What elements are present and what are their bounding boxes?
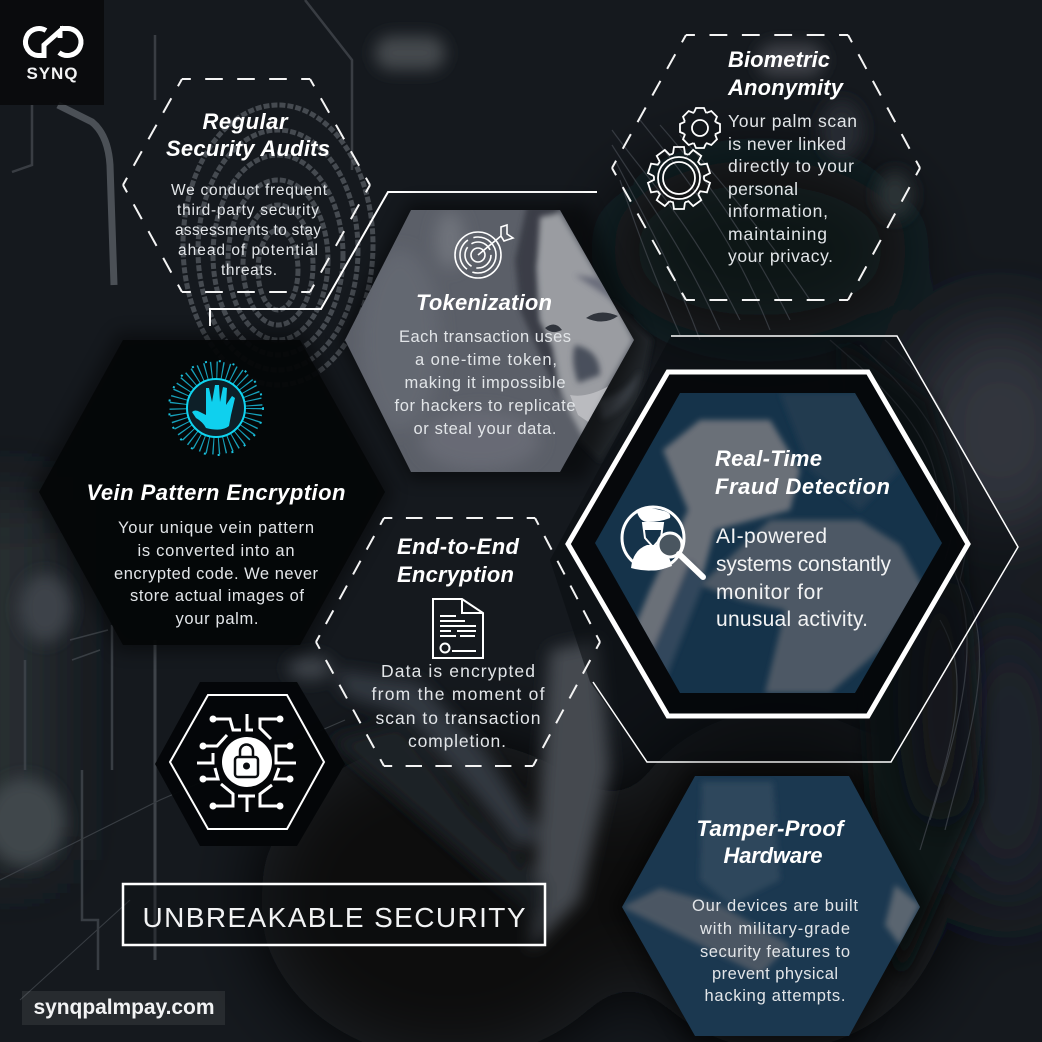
Tamper-Proof text (692, 897, 858, 1005)
panel: Tamper-Proof Hardware (612, 768, 930, 1042)
Real-Time Fraud Detection heading: Fraud Detection (715, 474, 890, 499)
End-to-End Encryption text: Data is encrypted (381, 661, 535, 681)
Regular Security Audits text: assessments to stay (175, 222, 321, 239)
Tamper-Proof heading: Tamper-Proof (696, 816, 846, 841)
Tokenization text: making it impossible (404, 374, 566, 392)
logo panel (0, 0, 104, 105)
dashed hexagon (612, 35, 920, 300)
Vein Pattern Encryption text: your palm. (176, 610, 258, 628)
Tokenization text: a one-time token, (415, 351, 557, 369)
title: UNBREAKABLE SECURITY (142, 902, 526, 933)
thin outline hexagon (593, 336, 1018, 762)
logo mark (25, 28, 81, 56)
tech lines left (0, 0, 352, 1000)
logo wordmark: SYNQ (26, 64, 78, 83)
End-to-End Encryption text (372, 661, 545, 751)
hair strands (612, 120, 979, 850)
icon: gears (647, 108, 720, 209)
Tamper-Proof heading (696, 816, 846, 868)
Regular Security Audits heading: Regular (202, 109, 289, 134)
Tokenization text: for hackers to replicate (394, 397, 576, 415)
Biometric Anonymity text: directly to your (728, 156, 854, 176)
website url (22, 991, 225, 1025)
Biometric Anonymity text: information, (728, 201, 828, 221)
icon: detective with magnifier (622, 507, 703, 577)
Real-Time Fraud Detection text: monitor for (716, 581, 823, 604)
Biometric Anonymity text (728, 111, 857, 266)
End-to-End Encryption text: from the moment of (372, 684, 545, 704)
Vein Pattern Encryption text: is converted into an (138, 542, 294, 560)
End-to-End Encryption text: completion. (408, 731, 506, 751)
panel: Vein Pattern Encryption (30, 332, 394, 652)
website url: synqpalmpay.com (34, 996, 214, 1019)
icon: document (433, 599, 483, 658)
face outside hexagon (578, 300, 652, 462)
Tamper-Proof text: Our devices are built (692, 897, 858, 915)
Real-Time Fraud Detection text: AI-powered (716, 525, 827, 548)
Regular Security Audits text: We conduct frequent (171, 182, 328, 199)
panel: Regular Security Audits (123, 79, 370, 292)
panel: Real-Time Fraud Detection (550, 336, 1018, 762)
Biometric Anonymity text: your privacy. (728, 246, 833, 266)
Tokenization text: or steal your data. (414, 420, 556, 438)
Regular Security Audits text: threats. (221, 262, 277, 279)
Tamper-Proof text: security features to (700, 943, 850, 961)
Real-Time Fraud Detection text: unusual activity. (716, 608, 868, 631)
icon: glowing blue hand in circuit ring (169, 361, 263, 455)
End-to-End Encryption heading: Encryption (397, 562, 514, 587)
Biometric Anonymity heading: Biometric (728, 47, 830, 72)
Biometric Anonymity text: maintaining (728, 224, 827, 244)
Vein Pattern Encryption text: Your unique vein pattern (118, 519, 314, 537)
Regular Security Audits text (171, 182, 328, 279)
End-to-End Encryption text: scan to transaction (376, 708, 540, 728)
Biometric Anonymity text: is never linked (728, 134, 846, 154)
Regular Security Audits text: ahead of potential (178, 242, 318, 259)
Regular Security Audits text: third-party security (177, 202, 319, 219)
icon: padlock with circuit traces (197, 714, 296, 812)
Biometric Anonymity text: Your palm scan (728, 111, 857, 131)
fingerprint (183, 105, 373, 385)
Tokenization text (394, 328, 576, 438)
Vein Pattern Encryption heading: Vein Pattern Encryption (86, 480, 346, 505)
Real-Time Fraud Detection heading (715, 446, 890, 499)
Tamper-Proof heading: Hardware (724, 843, 822, 868)
panel: Tokenization (339, 202, 642, 480)
dashed hexagon (123, 79, 370, 292)
End-to-End Encryption heading: End-to-End (397, 534, 520, 559)
Vein Pattern Encryption text (114, 519, 318, 628)
Regular Security Audits heading: Security Audits (166, 136, 330, 161)
panel: End-to-End Encryption (316, 518, 600, 766)
Tamper-Proof text: with military-grade (699, 920, 850, 938)
dashed hexagon (316, 518, 600, 766)
Real-Time Fraud Detection text (716, 525, 892, 631)
End-to-End Encryption heading (397, 534, 520, 587)
title (123, 884, 545, 945)
Tamper-Proof text: prevent physical (712, 965, 838, 983)
Vein Pattern Encryption text: store actual images of (130, 587, 304, 605)
Tokenization text: Each transaction uses (399, 328, 571, 346)
Tamper-Proof text: hacking attempts. (704, 987, 846, 1005)
Biometric Anonymity text: personal (728, 179, 798, 199)
connector line (210, 192, 597, 326)
Biometric Anonymity heading (727, 47, 845, 100)
Regular Security Audits heading (166, 109, 330, 161)
Tokenization heading: Tokenization (416, 290, 552, 315)
Vein Pattern Encryption text: encrypted code. We never (114, 565, 318, 583)
icon: target with arrow (455, 225, 513, 278)
panel: Biometric Anonymity (612, 35, 920, 300)
Real-Time Fraud Detection text: systems constantly (716, 553, 892, 576)
Biometric Anonymity heading: Anonymity (727, 75, 845, 100)
panel: lock badge (155, 682, 345, 846)
Real-Time Fraud Detection heading: Real-Time (715, 446, 822, 471)
